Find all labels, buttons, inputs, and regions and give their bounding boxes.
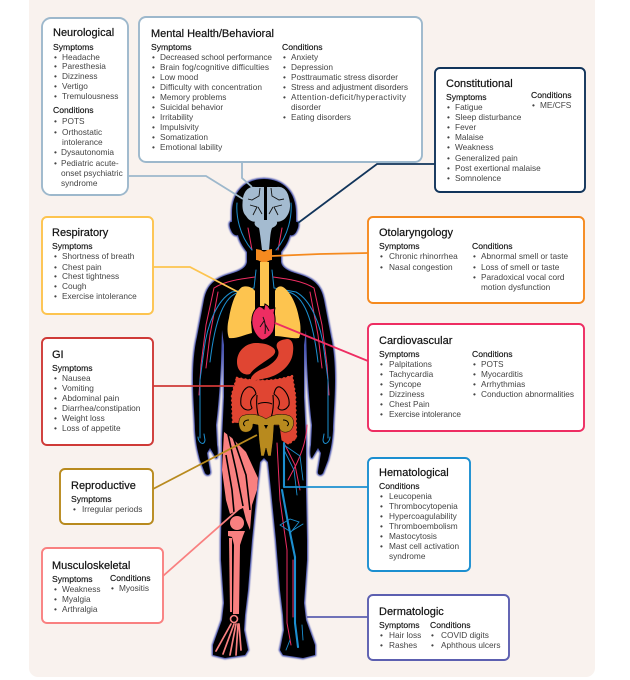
symptoms list: • bbox=[380, 359, 383, 369]
symptoms list: • bbox=[54, 291, 57, 301]
conditions list: • bbox=[54, 116, 57, 126]
conditions list: Posttraumatic stress disorder bbox=[291, 72, 398, 82]
conditions list: • bbox=[283, 112, 286, 122]
heading: reproductive: Reproductive bbox=[71, 480, 136, 492]
panel: cardiovascular bbox=[368, 324, 584, 431]
symptoms list bbox=[52, 363, 141, 433]
symptoms list: Symptoms bbox=[52, 363, 93, 373]
conditions list: • bbox=[473, 262, 476, 272]
symptoms list: Somatization bbox=[160, 132, 208, 142]
conditions list: syndrome bbox=[389, 551, 426, 561]
symptoms list: • bbox=[54, 281, 57, 291]
symptoms list: Shortness of breath bbox=[62, 251, 135, 261]
heading: otolaryngology: Otolaryngology bbox=[379, 227, 453, 239]
symptoms list: Cough bbox=[62, 281, 87, 291]
symptoms list: • bbox=[54, 373, 57, 383]
conditions list: • bbox=[380, 511, 383, 521]
symptoms list: Suicidal behavior bbox=[160, 102, 223, 112]
conditions list: Attention-deficit/hyperactivity bbox=[291, 92, 407, 102]
symptoms list: Syncope bbox=[389, 379, 422, 389]
symptoms list: Weight loss bbox=[62, 413, 105, 423]
conditions list: POTS bbox=[481, 359, 504, 369]
symptoms list bbox=[379, 349, 461, 419]
symptoms list: Impulsivity bbox=[160, 122, 200, 132]
symptoms list: • bbox=[54, 423, 57, 433]
conditions list: Mast cell activation bbox=[389, 541, 459, 551]
conditions list: • bbox=[431, 640, 434, 650]
conditions list: Orthostatic bbox=[62, 127, 102, 137]
symptoms list: • bbox=[152, 112, 155, 122]
intestines bbox=[232, 376, 296, 444]
symptoms list bbox=[53, 42, 118, 101]
symptoms list: • bbox=[447, 122, 450, 132]
symptoms list bbox=[379, 620, 421, 650]
conditions list: • bbox=[473, 389, 476, 399]
symptoms list: Generalized pain bbox=[455, 153, 518, 163]
symptoms list: Brain fog/cognitive difficulties bbox=[160, 62, 269, 72]
symptoms list bbox=[52, 241, 137, 301]
symptoms list: Decreased school performance bbox=[160, 52, 272, 62]
panel: GI bbox=[42, 338, 153, 445]
symptoms list: • bbox=[54, 403, 57, 413]
symptoms list: • bbox=[54, 383, 57, 393]
symptoms list: Somnolence bbox=[455, 173, 502, 183]
symptoms list: • bbox=[447, 112, 450, 122]
connector: musculoskeletal bbox=[163, 508, 240, 576]
blood vessels bbox=[198, 203, 330, 650]
symptoms list: • bbox=[73, 504, 76, 514]
symptoms list: • bbox=[54, 413, 57, 423]
symptoms list: Fever bbox=[455, 122, 476, 132]
symptoms list: Dizziness bbox=[62, 71, 98, 81]
heading: cardiovascular: Cardiovascular bbox=[379, 335, 453, 347]
heading: GI: GI bbox=[52, 349, 64, 361]
conditions list: Myositis bbox=[119, 583, 149, 593]
conditions list: Thromboembolism bbox=[389, 521, 458, 531]
conditions list: Eating disorders bbox=[291, 112, 351, 122]
symptoms list: Symptoms bbox=[379, 241, 420, 251]
symptoms list: Nasal congestion bbox=[389, 262, 453, 272]
conditions list: • bbox=[380, 521, 383, 531]
conditions list: Conditions bbox=[531, 90, 572, 100]
thyroid bbox=[256, 249, 272, 263]
symptoms list: • bbox=[447, 173, 450, 183]
symptoms list: • bbox=[152, 132, 155, 142]
symptoms list: Tachycardia bbox=[389, 369, 434, 379]
symptoms list: Emotional lability bbox=[160, 142, 223, 152]
symptoms list: Chest Pain bbox=[389, 399, 430, 409]
symptoms list: Irregular periods bbox=[82, 504, 142, 514]
symptoms list: Headache bbox=[62, 52, 100, 62]
symptoms list: Symptoms bbox=[52, 574, 93, 584]
conditions list bbox=[430, 620, 500, 650]
symptoms list: • bbox=[380, 399, 383, 409]
symptoms list: • bbox=[54, 584, 57, 594]
symptoms list: Palpitations bbox=[389, 359, 432, 369]
symptoms list: • bbox=[152, 92, 155, 102]
symptoms list: • bbox=[152, 102, 155, 112]
symptoms list: • bbox=[447, 102, 450, 112]
conditions list: • bbox=[431, 630, 434, 640]
conditions list: Leucopenia bbox=[389, 491, 432, 501]
connector: mental health bbox=[242, 162, 252, 187]
conditions list: Conditions bbox=[379, 481, 420, 491]
leg muscles bbox=[222, 430, 258, 530]
symptoms list: Fatigue bbox=[455, 102, 483, 112]
conditions list bbox=[110, 573, 151, 593]
connector: GI bbox=[153, 385, 234, 387]
symptoms list: • bbox=[380, 409, 383, 419]
symptoms list: Malaise bbox=[455, 132, 484, 142]
panel: neurological bbox=[42, 18, 128, 195]
liver and stomach bbox=[237, 339, 293, 380]
symptoms list: • bbox=[54, 71, 57, 81]
heading: hematological: Hematological bbox=[379, 467, 449, 479]
symptoms list: Difficulty with concentration bbox=[160, 82, 262, 92]
symptoms list: • bbox=[54, 604, 57, 614]
symptoms list: • bbox=[54, 262, 57, 272]
heading: neurological: Neurological bbox=[53, 27, 114, 39]
conditions list: Stress and adjustment disorders bbox=[291, 82, 408, 92]
symptoms list bbox=[379, 241, 458, 272]
conditions list: POTS bbox=[62, 116, 85, 126]
symptoms list: Myalgia bbox=[62, 594, 91, 604]
symptoms list: Rashes bbox=[389, 640, 417, 650]
symptoms list: Weakness bbox=[455, 142, 494, 152]
conditions list: • bbox=[380, 541, 383, 551]
conditions list: Conditions bbox=[430, 620, 471, 630]
conditions list bbox=[53, 105, 123, 188]
connector: respiratory bbox=[153, 267, 238, 292]
conditions list: intolerance bbox=[62, 137, 103, 147]
panel: musculoskeletal bbox=[42, 548, 163, 623]
symptoms list: Symptoms bbox=[151, 42, 192, 52]
conditions list: Conditions bbox=[472, 241, 513, 251]
uterus and ovaries bbox=[239, 414, 294, 456]
symptoms list: • bbox=[54, 594, 57, 604]
symptoms list: Chest pain bbox=[62, 262, 102, 272]
symptoms list: Chronic rhinorrhea bbox=[389, 251, 458, 261]
conditions list bbox=[472, 349, 574, 399]
conditions list: • bbox=[54, 158, 57, 168]
symptoms list: Nausea bbox=[62, 373, 91, 383]
symptoms list: Exercise intolerance bbox=[389, 409, 461, 419]
symptoms list: Symptoms bbox=[53, 42, 94, 52]
symptoms list: Symptoms bbox=[71, 494, 112, 504]
body figure bbox=[193, 179, 335, 658]
conditions list: • bbox=[473, 359, 476, 369]
conditions list: Dysautonomia bbox=[61, 147, 114, 157]
conditions list: Hypercoagulability bbox=[389, 511, 458, 521]
symptoms list: Symptoms bbox=[379, 620, 420, 630]
heading: mental health/behavioral: Mental Health/Behavioral bbox=[151, 28, 274, 40]
conditions list: • bbox=[283, 62, 286, 72]
conditions list: onset psychiatric bbox=[61, 168, 123, 178]
symptoms list bbox=[151, 42, 272, 152]
symptoms list bbox=[446, 92, 541, 183]
symptoms list: • bbox=[54, 52, 57, 62]
symptoms list: Chest tightness bbox=[62, 271, 119, 281]
symptoms list: • bbox=[447, 163, 450, 173]
symptoms list: • bbox=[447, 142, 450, 152]
connector lines bbox=[128, 162, 435, 617]
symptoms list: • bbox=[380, 379, 383, 389]
symptoms list: Symptoms bbox=[379, 349, 420, 359]
conditions list: Depression bbox=[291, 62, 333, 72]
conditions list: • bbox=[283, 72, 286, 82]
heading: dermatologic: Dermatologic bbox=[379, 606, 444, 618]
symptoms list: Weakness bbox=[62, 584, 101, 594]
symptoms list: • bbox=[54, 61, 57, 71]
symptoms list: • bbox=[447, 132, 450, 142]
conditions list: • bbox=[283, 82, 286, 92]
conditions list: Conditions bbox=[110, 573, 151, 583]
leg bones bbox=[216, 516, 245, 655]
symptoms list: • bbox=[54, 91, 57, 101]
conditions list: Paradoxical vocal cord bbox=[481, 272, 565, 282]
conditions list: • bbox=[380, 491, 383, 501]
conditions list: • bbox=[283, 92, 286, 102]
panel: mental health/behavioral bbox=[139, 17, 422, 162]
connector: cardiovascular bbox=[275, 323, 368, 361]
panel: otolaryngology bbox=[368, 217, 584, 303]
symptoms list: Irritability bbox=[160, 112, 194, 122]
conditions list: • bbox=[532, 100, 535, 110]
connector: constitutional bbox=[298, 164, 435, 223]
kidneys bbox=[241, 387, 289, 418]
conditions list bbox=[282, 42, 408, 122]
symptoms list: Vomiting bbox=[62, 383, 94, 393]
symptoms list: Tremulousness bbox=[62, 91, 118, 101]
symptoms list: • bbox=[152, 122, 155, 132]
symptoms list: • bbox=[380, 389, 383, 399]
conditions list: • bbox=[54, 147, 57, 157]
conditions list: • bbox=[473, 369, 476, 379]
connector: dermatologic bbox=[307, 616, 368, 618]
conditions list bbox=[472, 241, 569, 292]
conditions list: Anxiety bbox=[291, 52, 319, 62]
panel: reproductive bbox=[60, 469, 153, 524]
symptoms list: • bbox=[152, 82, 155, 92]
heading: musculoskeletal: Musculoskeletal bbox=[52, 560, 130, 572]
symptoms list: • bbox=[152, 52, 155, 62]
panel: dermatologic bbox=[368, 595, 509, 660]
symptoms list: Loss of appetite bbox=[62, 423, 121, 433]
symptoms list: Symptoms bbox=[52, 241, 93, 251]
symptoms list: Sleep disturbance bbox=[455, 112, 522, 122]
symptoms list: Arthralgia bbox=[62, 604, 98, 614]
panel: respiratory bbox=[42, 217, 153, 314]
symptoms list: • bbox=[152, 72, 155, 82]
symptoms list: Post exertional malaise bbox=[455, 163, 541, 173]
conditions list: • bbox=[283, 52, 286, 62]
conditions list: Myocarditis bbox=[481, 369, 523, 379]
connector: reproductive bbox=[153, 435, 257, 489]
conditions list: • bbox=[473, 379, 476, 389]
conditions list: Abnormal smell or taste bbox=[481, 251, 569, 261]
conditions list: ME/CFS bbox=[540, 100, 572, 110]
panel: hematological bbox=[368, 458, 470, 571]
symptoms list: Hair loss bbox=[389, 630, 421, 640]
conditions list bbox=[379, 481, 459, 561]
conditions list: • bbox=[54, 127, 57, 137]
symptoms list: • bbox=[54, 271, 57, 281]
conditions list: • bbox=[380, 501, 383, 511]
conditions list: disorder bbox=[291, 102, 321, 112]
symptoms list: • bbox=[380, 251, 383, 261]
conditions list: Conditions bbox=[472, 349, 513, 359]
conditions list: • bbox=[111, 583, 114, 593]
conditions list: • bbox=[473, 272, 476, 282]
connector: hematological bbox=[284, 486, 368, 488]
heading: respiratory: Respiratory bbox=[52, 227, 109, 239]
conditions list: COVID digits bbox=[441, 630, 489, 640]
symptoms list bbox=[71, 494, 142, 514]
conditions list: Conditions bbox=[53, 105, 94, 115]
symptoms list: • bbox=[152, 142, 155, 152]
symptoms list: • bbox=[54, 393, 57, 403]
symptoms list: • bbox=[447, 153, 450, 163]
symptoms list: • bbox=[380, 369, 383, 379]
symptoms list: • bbox=[152, 62, 155, 72]
conditions list bbox=[531, 90, 572, 110]
conditions list: • bbox=[380, 531, 383, 541]
conditions list: Thrombocytopenia bbox=[389, 501, 458, 511]
symptoms list: Symptoms bbox=[446, 92, 487, 102]
symptoms list: • bbox=[54, 81, 57, 91]
symptoms list: Paresthesia bbox=[62, 61, 106, 71]
conditions list: Loss of smell or taste bbox=[481, 262, 560, 272]
conditions list: Arrhythmias bbox=[481, 379, 525, 389]
symptoms list: Dizziness bbox=[389, 389, 425, 399]
symptoms list: Low mood bbox=[160, 72, 199, 82]
heart bbox=[252, 304, 275, 340]
symptoms list: Abdominal pain bbox=[62, 393, 120, 403]
conditions list: Conduction abnormalities bbox=[481, 389, 574, 399]
panel: constitutional bbox=[435, 68, 585, 192]
conditions list: Aphthous ulcers bbox=[441, 640, 500, 650]
symptoms list: Diarrhea/constipation bbox=[62, 403, 141, 413]
conditions list: • bbox=[473, 251, 476, 261]
symptoms list: • bbox=[54, 251, 57, 261]
conditions list: Conditions bbox=[282, 42, 323, 52]
symptoms list bbox=[52, 574, 101, 614]
symptoms list: • bbox=[380, 640, 383, 650]
conditions list: Pediatric acute- bbox=[61, 158, 119, 168]
symptoms list: • bbox=[380, 630, 383, 640]
trachea and lungs bbox=[228, 262, 300, 338]
connector: otolaryngology bbox=[272, 253, 368, 256]
heading: constitutional: Constitutional bbox=[446, 78, 513, 90]
connector: neurological bbox=[128, 176, 243, 199]
symptoms list: Exercise intolerance bbox=[62, 291, 137, 301]
body silhouette bbox=[193, 179, 335, 658]
conditions list: syndrome bbox=[61, 178, 98, 188]
brain bbox=[242, 187, 290, 250]
conditions list: Mastocytosis bbox=[389, 531, 437, 541]
symptoms list: Vertigo bbox=[62, 81, 88, 91]
symptoms list: • bbox=[380, 262, 383, 272]
conditions list: motion dysfunction bbox=[481, 282, 551, 292]
symptoms list: Memory problems bbox=[160, 92, 226, 102]
